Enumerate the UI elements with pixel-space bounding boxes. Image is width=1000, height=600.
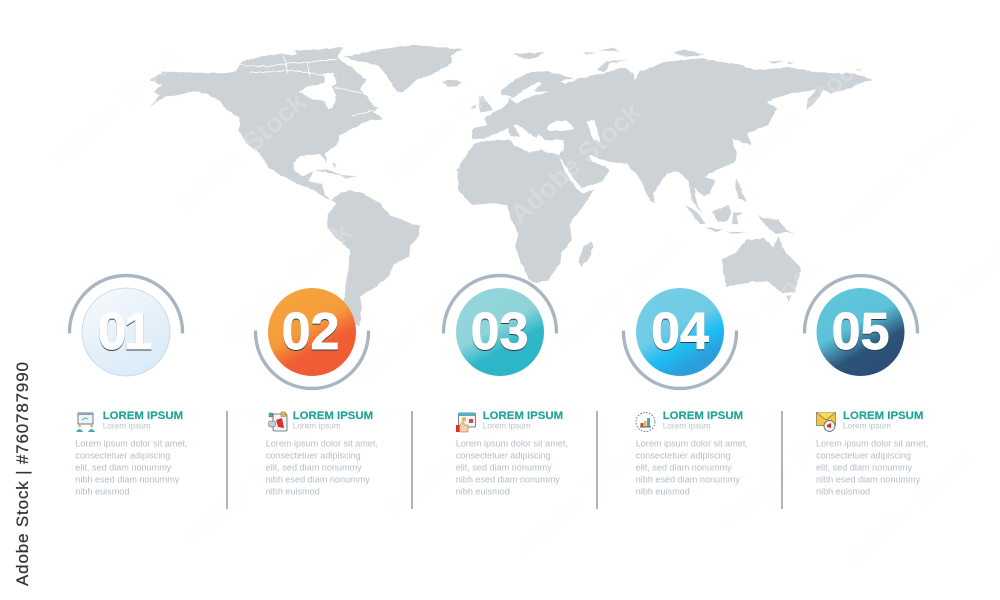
watermarks: Adobe Stock	[379, 56, 522, 189]
body text 4: nibh esed diam nonummy	[636, 475, 740, 485]
body text 3: consectetuer adipiscing	[456, 451, 551, 461]
arc 4	[624, 332, 736, 388]
vertical stock credit: Adobe Stock | #760787990	[13, 362, 32, 586]
body text 5: elit, sed diam nonummy	[816, 463, 912, 473]
number badge 3: 03	[471, 303, 528, 361]
North America	[150, 47, 383, 201]
body text 5: nibh esed diam nonummy	[816, 475, 921, 485]
subheading 4: Lorem ipsum	[663, 421, 711, 431]
Black Sea	[547, 121, 575, 131]
body text 5: Lorem ipsum dolor sit amet,	[816, 439, 928, 449]
Australia	[722, 237, 802, 302]
Arctic channels and straits	[240, 56, 373, 167]
body text 2	[266, 439, 378, 497]
subheading 2: Lorem ipsum	[293, 421, 341, 431]
body text 2: elit, sed diam nonummy	[266, 463, 362, 473]
body text 3: Lorem ipsum dolor sit amet,	[456, 439, 568, 449]
body text 3: nibh esed diam nonummy	[456, 475, 560, 485]
Mediterranean Sea	[470, 124, 563, 153]
Eurasia	[472, 58, 873, 213]
body text 2: nibh euismod	[266, 487, 320, 497]
step 1	[70, 276, 188, 497]
heading 3: LOREM IPSUM	[483, 410, 563, 422]
Caspian Sea	[587, 120, 601, 142]
heading 4: LOREM IPSUM	[663, 410, 743, 422]
watermarks: Adobe Stock	[214, 216, 357, 349]
arc 3	[444, 276, 556, 332]
world map	[150, 45, 873, 325]
Greenland	[343, 45, 463, 92]
body text 1	[75, 439, 188, 497]
heading 5: LOREM IPSUM	[843, 410, 923, 422]
icon: browser window and thumbs up	[456, 413, 476, 432]
icon: megaphone on document	[268, 412, 287, 431]
watermarks: Adobe Stock	[169, 86, 312, 219]
watermarks: Adobe Stock	[834, 106, 977, 239]
step 3	[444, 276, 568, 497]
watermarks: Adobe Stock	[379, 391, 522, 524]
sea cutouts	[470, 82, 607, 193]
watermarks: Adobe Stock	[344, 261, 487, 394]
Hudson Bay	[299, 73, 337, 109]
body text 3: nibh euismod	[456, 487, 510, 497]
watermarks: Adobe Stock	[44, 41, 187, 174]
body text 2: consectetuer adipiscing	[266, 451, 361, 461]
body text 2: Lorem ipsum dolor sit amet,	[266, 439, 378, 449]
watermarks: Adobe Stock	[504, 96, 647, 229]
body text 1: nibh esed diam nonummy	[75, 475, 180, 485]
body text 2: nibh esed diam nonummy	[266, 475, 370, 485]
body text 3	[456, 439, 568, 497]
subheading 1: Lorem ipsum	[103, 421, 151, 431]
arc 2	[256, 332, 368, 388]
body text 4: Lorem ipsum dolor sit amet,	[636, 439, 748, 449]
number badge 5	[816, 288, 904, 376]
body text 5: consectetuer adipiscing	[816, 451, 911, 461]
Caribbean islands	[313, 163, 358, 178]
number badge 3	[456, 288, 544, 376]
watermarks: Adobe Stock	[729, 46, 872, 179]
body text 4: consectetuer adipiscing	[636, 451, 731, 461]
icon: bar chart in dashed circle	[636, 412, 655, 432]
step 4	[624, 288, 748, 497]
body text 4: elit, sed diam nonummy	[636, 463, 732, 473]
body text 4	[636, 439, 748, 497]
step 2	[256, 288, 378, 497]
body text 1: elit, sed diam nonummy	[75, 463, 172, 473]
Madagascar	[578, 242, 593, 267]
icon: envelope with megaphone badge	[816, 412, 836, 432]
body text 4: nibh euismod	[636, 487, 690, 497]
arc 1	[70, 276, 182, 332]
Red Sea	[558, 155, 581, 191]
number badge 1: 01	[98, 303, 151, 361]
number badge 4: 04	[651, 303, 709, 361]
Africa	[457, 138, 594, 283]
number badge 2	[268, 288, 356, 376]
Southeast Asian islands	[685, 178, 796, 236]
body text 1: consectetuer adipiscing	[75, 451, 170, 461]
watermarks: Adobe Stock	[839, 441, 982, 574]
watermarks: Adobe Stock	[174, 421, 317, 554]
number badge 5: 05	[832, 303, 889, 361]
Gulf of Aden	[580, 184, 602, 193]
watermarks: Adobe Stock	[509, 431, 652, 564]
watermarks: Adobe Stock	[684, 251, 827, 384]
step 5	[804, 276, 928, 497]
South America	[327, 190, 420, 325]
Baltic Sea	[509, 82, 550, 104]
map: Americas and Greenland	[150, 45, 463, 325]
subheading 5: Lorem ipsum	[843, 421, 891, 431]
body text 1: Lorem ipsum dolor sit amet,	[75, 439, 188, 449]
number badge 2: 02	[282, 303, 339, 361]
map: Europe, Africa, Asia and Oceania	[457, 48, 873, 302]
body text 5	[816, 439, 928, 497]
body text 3: elit, sed diam nonummy	[456, 463, 552, 473]
body text 5: nibh euismod	[816, 487, 870, 497]
watermarks: Adobe Stock	[714, 401, 857, 534]
icon: presentation board with two people	[76, 413, 95, 432]
subheading 3: Lorem ipsum	[483, 421, 531, 431]
heading 2: LOREM IPSUM	[293, 410, 373, 422]
body text 1: nibh euismod	[75, 487, 129, 497]
Persian Gulf	[588, 155, 607, 166]
number badge 4	[636, 288, 724, 376]
heading 1: LOREM IPSUM	[103, 410, 183, 422]
number badge 1	[82, 288, 170, 376]
Iceland	[442, 80, 463, 87]
arc 5	[804, 276, 918, 332]
Arctic and northern islands	[470, 48, 862, 113]
watermarks: Adobe Stock	[549, 226, 692, 359]
